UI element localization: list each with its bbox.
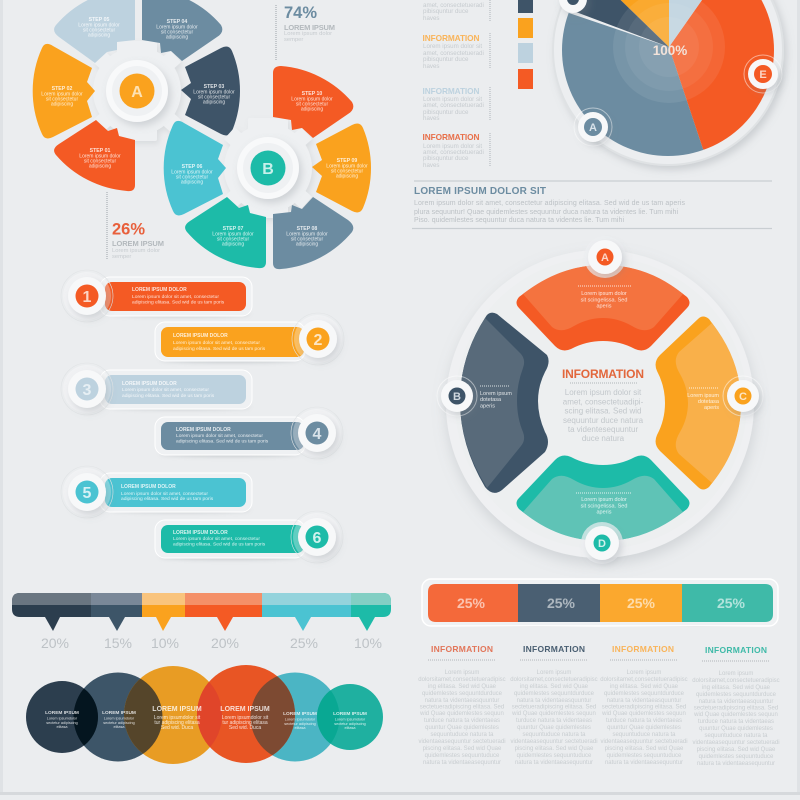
circle labels: Sed wid. Duca — [229, 725, 261, 731]
information column 2: quuntur Quae quidemlestes — [517, 725, 591, 731]
step 06 petal — [164, 121, 226, 215]
step 02 petal: adipiscing — [51, 102, 73, 108]
ring centre text: sequuntur duce natura — [563, 416, 644, 425]
list item 4: 4 — [313, 426, 322, 443]
pie badge top — [559, 0, 587, 13]
segment B: aperis — [480, 404, 495, 410]
percentage labels: 25% — [290, 635, 318, 651]
ring centre text: duce natura — [582, 434, 625, 443]
segment C: Lorem ipsum — [687, 393, 719, 399]
legend entry: top: amet, consectetueradi — [423, 2, 484, 9]
step 09 petal: Lorem ipsum dolor — [326, 164, 368, 170]
information column 4: natura ta videntaeasquuntur — [699, 699, 773, 705]
information column 1: Lorem ipsum — [445, 670, 479, 676]
information column 3: sectetueradipiscing elitasa. Sed — [602, 704, 686, 710]
hub B: B — [262, 161, 274, 178]
callout: 74% — [276, 4, 335, 60]
information column 4: videntaeasequuntur sectetueradi — [692, 740, 780, 746]
step 08 petal: STEP 08 — [297, 226, 317, 232]
legend entry: red: Lorem ipsum dolor sit — [423, 143, 482, 150]
percentage labels: 15% — [104, 635, 132, 651]
segment D: aperis — [597, 510, 612, 516]
step 04 petal — [142, 0, 222, 61]
step 07 petal — [185, 197, 266, 268]
information column 1: dolorsitamet,consectetueradipisc — [418, 677, 506, 683]
pie slices — [562, 0, 774, 156]
legend entry: top: pibisquntur duce — [423, 8, 469, 15]
step 08 petal: Lorem ipsum dolor — [286, 232, 328, 238]
list item 3: LOREM IPSUM DOLOR — [122, 381, 177, 387]
legend text column — [422, 0, 490, 169]
step 03 petal: adipiscing — [203, 100, 225, 106]
legend entry: orange: Lorem ipsum dolor sit — [423, 43, 482, 50]
step 05 petal: Lorem ipsum dolor — [78, 22, 120, 28]
information column 4: natura ta videntaeasequuntur — [697, 761, 775, 767]
step 03 petal: STEP 03 — [204, 84, 224, 90]
step 03 petal: sit consectetur — [198, 94, 230, 100]
callout: 26%: semper — [112, 254, 131, 260]
information column 3: quidemlestes sequuntdurduce — [604, 691, 685, 697]
pie total label: 100% — [653, 43, 687, 58]
list item 4: adipiscing elitasa. Sed wid de us tam poris — [176, 438, 269, 444]
list item 5: 5 — [83, 485, 92, 502]
circle labels — [45, 706, 367, 731]
step 05 petal: adipiscing — [88, 32, 110, 38]
gear body A — [93, 41, 181, 141]
step 02 petal: sit consectetur — [46, 96, 78, 102]
list item 2 — [155, 313, 344, 365]
numbered list — [61, 270, 344, 563]
step 05 petal: STEP 05 — [89, 17, 109, 23]
circle labels: LOREM IPSUM — [102, 710, 136, 716]
list item 5: LOREM IPSUM DOLOR — [121, 484, 176, 490]
list item 2: 2 — [314, 332, 323, 349]
information column 4: Lorem ipsum — [719, 671, 753, 677]
information column 1: sectetueradipiscing elitasa. Sed — [420, 704, 504, 710]
step 09 petal — [312, 124, 371, 212]
badge A: A — [601, 252, 609, 264]
legend entry: light blue: haves — [423, 115, 440, 122]
badge D: D — [598, 538, 606, 550]
list item 6: adipiscing elitasa. Sed wid de us tam poris — [173, 542, 266, 548]
information column 4: quidemlestes sequuntuduce — [699, 754, 774, 760]
list item 3 — [61, 363, 252, 415]
circle labels: Lorem ipsumdolor — [104, 716, 135, 720]
legend entry: light blue: pibisquntur duce — [423, 109, 469, 116]
information column 1: quidemlestes sequuntuduce — [425, 753, 500, 759]
segment D: sit scingelissa. Sed — [581, 504, 627, 510]
circle labels: Lorem ipsumdolor — [285, 718, 316, 722]
ring centre text: amet, consectetuadipi- — [563, 398, 644, 406]
information column 4: quuntur Quae quidemlestes — [699, 726, 773, 732]
step 08 petal: sit consectetur — [291, 236, 323, 242]
information column 4 — [692, 645, 780, 767]
callout: 26%: 26% — [112, 220, 145, 238]
information column 1: sequuntuduce natura ta — [430, 732, 494, 738]
list item 1 — [61, 270, 252, 322]
segment A: Lorem ipsum dolor — [581, 291, 627, 297]
information column 3: quuntur Quae quidemlestes — [607, 725, 681, 731]
step 09 petal: sit consectetur — [331, 168, 363, 174]
step 10 petal — [273, 66, 353, 138]
step 02 petal: STEP 02 — [52, 86, 72, 92]
information column 3: quidemlestes sequuntuduce — [607, 753, 682, 759]
information column 4: sectetueradipiscing elitasa. Sed — [694, 706, 778, 712]
ring centre text: Lorem ipsum dolor sit — [565, 388, 642, 397]
callout: 74%: 74% — [284, 4, 317, 22]
circle labels: LOREM IPSUM — [333, 711, 367, 717]
circle labels: Lorem ipsumdolor sit — [222, 715, 269, 721]
step 09 petal: adipiscing — [336, 174, 358, 180]
information column 1: quidemlestes sequuntdurduce — [422, 691, 503, 697]
information column 1: INFORMATION — [431, 644, 493, 654]
information column 1: ing elitasa. Sed wid Quae — [428, 684, 497, 690]
circle labels: elitasa — [57, 725, 68, 729]
information column 1: videntaeasequuntur sectetueradi — [418, 739, 506, 745]
information column 1: quuntur Quae quidemlestes — [425, 725, 499, 731]
callout: 74%: LOREM IPSUM — [284, 23, 335, 32]
list item 6: 6 — [313, 530, 322, 547]
pie badge E: E — [759, 69, 767, 81]
step 03 petal: Lorem ipsum dolor — [193, 90, 235, 96]
callout: 26%: LOREM IPSUM — [112, 239, 164, 248]
segment B — [460, 313, 549, 493]
step 01 petal: STEP 01 — [90, 148, 110, 154]
badge B: B — [453, 391, 461, 403]
information column 2: sequuntuduce natura ta — [522, 732, 586, 738]
step 07 petal: sit consectetur — [217, 236, 249, 242]
circle labels: elitasa — [295, 726, 306, 730]
information column 4: quidemlestes sequuntdurduce — [696, 692, 777, 698]
segment D — [516, 456, 690, 541]
step 07 petal: STEP 07 — [223, 226, 243, 232]
step 09 petal: STEP 09 — [337, 158, 357, 164]
step 06 petal: adipiscing — [181, 180, 203, 186]
information column 2: natura ta videntaeasequuntur — [515, 760, 593, 766]
four-part percentage bar: 25% — [457, 595, 486, 611]
circle labels: Sed wid. Duca — [161, 725, 193, 731]
information column 2 — [510, 644, 598, 766]
information column 2: dolorsitamet,consectetueradipisc — [510, 677, 598, 683]
segment C: aperis — [704, 405, 719, 411]
segment D: Lorem ipsum dolor — [581, 497, 627, 503]
step 08 petal — [273, 197, 353, 269]
step 01 petal: sit consectetur — [84, 158, 116, 164]
list item 3: 3 — [83, 382, 92, 399]
list item 6 — [155, 511, 343, 563]
list item 5: adipiscing elitasa. Sed wid de us tam poris — [121, 496, 214, 502]
segment B: dotetasa — [480, 397, 502, 403]
information column 3: natura ta videntaeasequuntur — [605, 760, 683, 766]
step 10 petal: adipiscing — [301, 106, 323, 112]
circle labels: LOREM IPSUM — [283, 711, 317, 717]
badge B — [437, 376, 477, 416]
pie badge E — [744, 55, 782, 93]
legend entry: orange: haves — [423, 63, 440, 70]
list item 3: adipiscing elitasa. Sed wid de us tam poris — [122, 393, 215, 399]
list item 6: LOREM IPSUM DOLOR — [173, 530, 228, 536]
information column 4: ing elitasa. Sed wid Quae — [702, 685, 771, 691]
ring centre text: scing elitasa. Sed wid — [565, 406, 641, 416]
circle labels: elitasa — [114, 725, 125, 729]
step 04 petal: Lorem ipsum dolor — [156, 24, 198, 30]
segment A: sit scingelissa. Sed — [581, 298, 627, 304]
information column 1: wid Quae quidemlestes sequun — [419, 711, 504, 717]
circle labels: sectetur adipiscing — [103, 721, 135, 725]
step 01 petal: adipiscing — [89, 164, 111, 170]
step 07 petal: adipiscing — [222, 242, 244, 248]
percentage labels: 10% — [151, 635, 179, 651]
legend entry: red: INFORMATION — [422, 132, 480, 142]
circle labels: Lorem ipsumdolor — [335, 718, 366, 722]
hub A: A — [131, 84, 143, 101]
legend entry: orange: pibisquntur duce — [423, 56, 469, 63]
information column 3: natura ta videntaeasquuntur — [607, 698, 681, 704]
step 06 petal: STEP 06 — [182, 164, 202, 170]
information column 1: natura ta videntaeasequuntur — [423, 760, 501, 766]
list item 4 — [155, 407, 343, 459]
information column 1: piscing elitasa. Sed wid Quae — [423, 746, 502, 752]
list item 2: adipiscing elitasa. Sed wid de us tam poris — [173, 346, 266, 352]
circle labels: LOREM IPSUM — [220, 706, 270, 713]
list item 1: 1 — [83, 289, 92, 306]
information column 1 — [418, 644, 506, 766]
step 04 petal: sit consectetur — [161, 30, 193, 36]
information column 2: piscing elitasa. Sed wid Quae — [515, 746, 594, 752]
callout: 26% — [107, 192, 164, 260]
information column 2: INFORMATION — [523, 644, 585, 654]
legend entry: light blue: INFORMATION — [422, 86, 480, 96]
step 04 petal: STEP 04 — [167, 19, 187, 25]
gear body B — [224, 118, 312, 218]
list item 1: LOREM IPSUM DOLOR — [132, 287, 187, 293]
information column 3: videntaeasequuntur sectetueradi — [600, 739, 688, 745]
legend entry: orange — [422, 33, 490, 70]
pie badge A — [574, 108, 612, 146]
list item 2: Lorem ipsum dolor sit amet, consectetur — [173, 340, 260, 346]
list item 5: Lorem ipsum dolor sit amet, consectetur — [121, 491, 208, 497]
information column 2: Lorem ipsum — [537, 670, 571, 676]
information column 3: INFORMATION — [612, 644, 674, 654]
information column 3: turduce natura ta videntaeas — [606, 718, 682, 724]
panel: gear wheel B — [164, 66, 371, 269]
circle labels: elitasa — [345, 726, 356, 730]
information column 3: dolorsitamet,consectetueradipisc — [600, 677, 688, 683]
step 06 petal: Lorem ipsum dolor — [171, 170, 213, 176]
panel: gear wheel A — [33, 0, 240, 191]
legend entry: orange: amet, consectetueradi — [423, 50, 484, 57]
text block: lorem ipsum dolor sit: plura sequuntur! Quae quidemlestes sequuntur duca natura ta videntes lie. Tum mihi — [414, 209, 678, 216]
circle labels: LOREM IPSUM — [152, 706, 202, 713]
percentage labels: 20% — [211, 635, 239, 651]
list item 1: adipiscing elitasa. Sed wid de us tam poris — [132, 300, 225, 306]
legend entry: orange: INFORMATION — [422, 33, 480, 43]
information column 2: ing elitasa. Sed wid Quae — [520, 684, 589, 690]
segment C: dotetasa — [698, 399, 720, 405]
hub B — [237, 137, 299, 199]
percentage labels: 20% — [41, 635, 69, 651]
information column 3: piscing elitasa. Sed wid Quae — [605, 746, 684, 752]
pie badge A: A — [589, 122, 597, 134]
legend entry: top — [423, 0, 490, 22]
information column 3: sequuntuduce natura ta — [612, 732, 676, 738]
information column 4: wid Quae quidemlestes sequun — [693, 712, 778, 718]
information column 2: videntaeasequuntur sectetueradi — [510, 739, 598, 745]
circle labels: LOREM IPSUM — [45, 710, 79, 716]
segment A: aperis — [597, 304, 612, 310]
ring centre text — [562, 367, 644, 443]
step 10 petal: Lorem ipsum dolor — [291, 96, 333, 102]
step 03 petal — [181, 47, 240, 135]
text block: lorem ipsum dolor sit: Lorem ipsum dolor sit amet, consectetur adipiscing elitasa. Sed wid de us tam aperis — [414, 200, 686, 207]
information column 2: wid Quae quidemlestes sequun — [511, 711, 596, 717]
information column 2: quidemlestes sequuntdurduce — [514, 691, 595, 697]
text block: lorem ipsum dolor sit — [412, 181, 772, 228]
information column 1: turduce natura ta videntaeas — [424, 718, 500, 724]
text block: lorem ipsum dolor sit: LOREM IPSUM DOLOR SIT — [414, 186, 546, 197]
information column 2: turduce natura ta videntaeas — [516, 718, 592, 724]
badge D — [581, 522, 623, 564]
step 02 petal — [33, 44, 95, 138]
list item 2: LOREM IPSUM DOLOR — [173, 333, 228, 339]
information column 3 — [600, 644, 688, 766]
badge A — [584, 236, 626, 278]
badge C: C — [739, 391, 747, 403]
information column 2: sectetueradipiscing elitasa. Sed — [512, 704, 596, 710]
legend entry: red — [422, 132, 490, 169]
callout: 74%: Lorem ipsum dolor — [284, 31, 332, 37]
information column 3: wid Quae quidemlestes sequun — [601, 711, 686, 717]
four-part percentage bar — [422, 579, 778, 627]
legend entry: red: haves — [423, 162, 440, 169]
legend entry: top: haves — [423, 15, 440, 22]
circle labels: sectetur adipiscing — [334, 722, 366, 726]
step 01 petal: Lorem ipsum dolor — [79, 154, 121, 160]
information column 4: sequuntuduce natura ta — [704, 733, 768, 739]
four-part percentage bar: 25% — [547, 595, 576, 611]
step 05 petal: sit consectetur — [83, 28, 115, 34]
information column 2: quidemlestes sequuntuduce — [517, 753, 592, 759]
segment A — [516, 265, 690, 350]
legend entry: red: amet, consectetueradi — [423, 149, 484, 156]
information column 2: natura ta videntaeasquuntur — [517, 698, 591, 704]
step 10 petal: sit consectetur — [296, 102, 328, 108]
four-part percentage bar: 25% — [717, 595, 746, 611]
information column 1: natura ta videntaeasquuntur — [425, 698, 499, 704]
callout: 26%: Lorem ipsum dolor — [112, 248, 160, 254]
legend entry: light blue: amet, consectetueradi — [423, 102, 484, 109]
information column 3: ing elitasa. Sed wid Quae — [610, 684, 679, 690]
step 06 petal: sit consectetur — [176, 174, 208, 180]
list item 5 — [61, 466, 252, 518]
text block: lorem ipsum dolor sit: Piso. quidemlestes sequuntur duca natura ta videntes lie. Tum mihi — [414, 217, 624, 224]
legend entry: red: pibisquntur duce — [423, 155, 469, 162]
list item 3: Lorem ipsum dolor sit amet, consectetur — [122, 387, 209, 393]
circle labels: tur adipiscing elitasa — [154, 720, 200, 726]
circle labels: Lorem ipsumdolor — [47, 716, 78, 720]
step 02 petal: Lorem ipsum dolor — [41, 92, 83, 98]
step 04 petal: adipiscing — [166, 34, 188, 40]
information column 4: turduce natura ta videntaeas — [698, 719, 774, 725]
step 01 petal — [54, 120, 135, 191]
legend entry: light blue: Lorem ipsum dolor sit — [423, 96, 482, 103]
information column 4: INFORMATION — [705, 645, 767, 655]
list item 4: LOREM IPSUM DOLOR — [176, 427, 231, 433]
panel: information ring — [437, 236, 763, 564]
pie chart — [552, 0, 790, 172]
circle labels: tur adipiscing elitasa — [222, 720, 268, 726]
ring centre text: ta videntesequuntur — [568, 425, 638, 434]
segment C — [656, 316, 741, 490]
legend colour swatches — [518, 0, 533, 89]
step 08 petal: adipiscing — [296, 242, 318, 248]
segment B: Lorem ipsum — [480, 391, 512, 397]
percentage labels: 10% — [354, 635, 382, 651]
step 07 petal: Lorem ipsum dolor — [212, 232, 254, 238]
four-part percentage bar: 25% — [627, 595, 656, 611]
percentage labels — [41, 635, 382, 651]
callout: 74%: semper — [284, 37, 303, 43]
circle labels: Lorem ipsumdolor sit — [154, 715, 201, 721]
information column 4: piscing elitasa. Sed wid Quae — [697, 747, 776, 753]
list item 1: Lorem ipsum dolor sit amet, consectetur — [132, 294, 219, 300]
list item 4: Lorem ipsum dolor sit amet, consectetur — [176, 433, 263, 439]
information column 4: dolorsitamet,consectetueradipisc — [692, 678, 780, 684]
overlapping circles — [26, 665, 383, 764]
circle labels: sectetur adipiscing — [46, 721, 78, 725]
step 10 petal: STEP 10 — [302, 91, 322, 97]
legend entry: light blue — [422, 86, 490, 122]
hub A — [106, 60, 168, 122]
circle labels: sectetur adipiscing — [284, 722, 316, 726]
information column 3: Lorem ipsum — [627, 670, 661, 676]
segmented percentage bar — [12, 593, 391, 651]
list item 6: Lorem ipsum dolor sit amet, consectetur — [173, 536, 260, 542]
ring centre text: INFORMATION — [562, 367, 644, 381]
step 05 petal — [54, 0, 135, 63]
badge C — [723, 376, 763, 416]
